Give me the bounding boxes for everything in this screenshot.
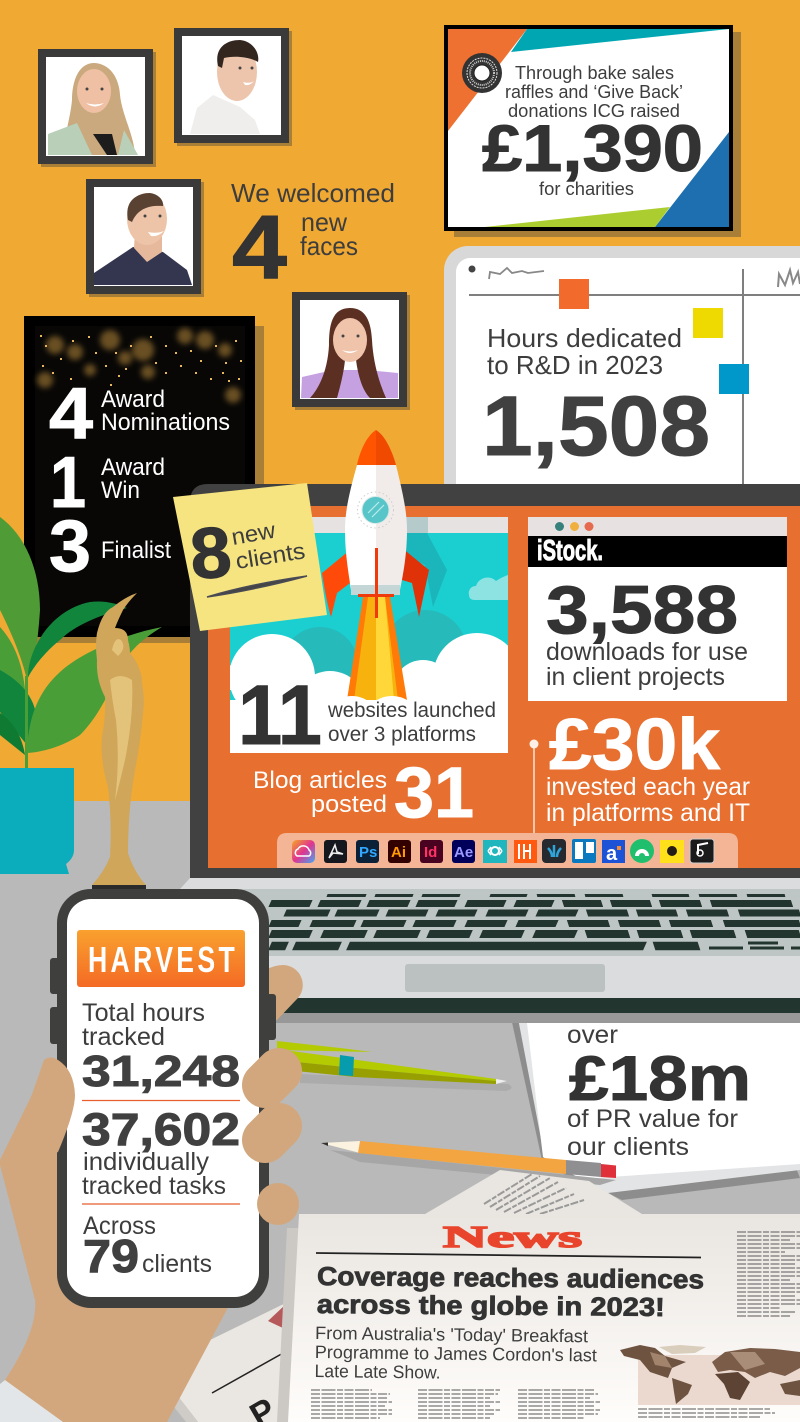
text: 11 websites launched: 11 [238,668,322,762]
panel: charity frame: Through bake sales [515,62,674,83]
framed photo: new starter 4 [292,292,410,410]
finger behind phone [260,965,303,1020]
rocket flame [347,597,407,700]
panel: PR value card: £18m [569,1044,751,1114]
panel: R&D whiteboard: to R&D in 2023 [487,350,663,380]
clouds over flame [347,696,407,700]
text: 30k invested: in platforms and IT [546,799,750,827]
text: 11 websites launched: over 3 platforms [328,723,476,746]
icon: mailchimp [660,840,684,863]
icon: after effects: Ae [454,844,473,861]
panel: phone Harvest stats: 31,248 [82,1047,240,1096]
panel: awards frame: Finalist [101,537,171,564]
sticky note: 8 new clients: 8 [188,512,234,595]
panel: phone Harvest stats: Across [83,1212,156,1240]
panel: phone Harvest stats [50,889,276,1308]
panel: R&D whiteboard: Hours dedicated [487,323,682,353]
shirt sleeve [0,1380,63,1422]
panel: charity frame: £1,390 [482,111,703,185]
hand thumb and fingers [30,1058,299,1225]
newspaper body copy [311,1232,800,1418]
panel: awards frame: Award [101,386,165,413]
panel: awards frame: Nominations [101,409,230,436]
panel: newspaper front page: Coverage reaches audiences [317,1261,704,1294]
icon: teal eye logo [483,840,507,863]
world map [620,1345,800,1405]
back newspaper [170,1296,300,1422]
panel: awards frame: Award [101,454,165,481]
desk surface [0,801,800,1422]
text: blog articles posted: 31 [394,754,474,833]
panel: phone Harvest stats: tracked [82,1023,165,1051]
panel: charity frame: for charities [539,178,634,199]
icon: green circle logo [630,839,654,863]
panel: newspaper front page: News [443,1219,582,1254]
panel: PR value card: our clients [567,1133,689,1161]
rocket [322,430,429,700]
text: 11 websites launched: websites launched [327,699,496,722]
browser window: iStock downloads: downloads for use [546,638,748,666]
browser window: iStock downloads [528,517,787,701]
icon: after effects [452,840,475,863]
icon: illustrator: Ai [391,844,406,861]
wall background [0,0,800,801]
text: we welcomed 4 new faces: faces [300,231,358,261]
panel: R&D whiteboard: 1,508 [482,379,710,473]
hand palm [0,1058,232,1422]
panel: phone Harvest stats: Total hours [82,999,205,1027]
keyboard keys [270,896,800,948]
framed photo: new starter 1 [38,49,156,167]
browser window: websites launched [229,517,521,753]
icon: illustrator [388,840,411,863]
panel: PR value card: over [567,1021,618,1049]
panel: awards frame: 3 [49,506,91,587]
pen [277,1041,512,1091]
panel: phone Harvest stats: 37,602 [82,1104,240,1155]
plant pot [0,768,74,874]
panel: awards frame: 4 [49,374,93,454]
text: 30k invested: invested each year [546,773,750,801]
panel: newspaper front page: Programme to James Cordon's last [315,1342,597,1365]
panel: charity frame [444,25,741,237]
text: we welcomed 4 new faces: 4 [232,198,287,298]
text: we welcomed 4 new faces: We welcomed [231,178,395,208]
panel: PR value card [510,1013,800,1200]
text: we welcomed 4 new faces [231,178,395,298]
text: blog articles posted: posted [311,791,387,818]
icon: acrobat [324,840,347,863]
plant [0,517,162,874]
panel: charity frame: raffles and ‘Give Back’ [505,81,683,102]
icon: indesign [420,840,443,863]
panel: awards frame: Win [101,477,140,504]
panel: R&D whiteboard [444,246,800,508]
text: we welcomed 4 new faces: new [301,207,347,237]
panel: newspaper front page: From Australia's 'Today' Breakfast [315,1323,588,1346]
browser window: iStock downloads: 3,588 [546,572,738,648]
panel: newspaper front page [277,1214,800,1422]
panel: phone Harvest stats: 79 [83,1230,139,1282]
Harvest logo: HARVEST [88,939,238,980]
laptop keyboard base [170,878,800,1023]
icon: blue a logo: a [606,843,618,865]
text: 30k invested [546,705,750,827]
award trophy [92,593,146,890]
icon: photoshop [356,840,379,863]
icon: blue a logo [602,840,625,865]
panel: phone Harvest stats: clients [142,1250,212,1278]
laptop screen [190,484,800,878]
text: blog articles posted: Blog articles [253,767,387,794]
icon: medallion [462,53,502,93]
icon: dark splash logo [542,839,566,863]
icon: orange bars logo [514,840,537,863]
sticky note: 8 new clients: clients [234,537,307,574]
text: 30k invested: £30k [549,705,721,785]
app dock [277,833,738,868]
icon: trello [572,839,596,863]
text: 11 websites launched [238,668,496,762]
pencil [321,1141,616,1185]
panel: charity frame: donations ICG raised [508,100,680,121]
icon: photoshop: Ps [359,844,377,861]
icon: stockphoto music [690,839,714,863]
newspaper flap [425,1170,642,1214]
text: blog articles posted [253,754,474,833]
framed photo: new starter 3 [86,179,204,297]
icon: indesign: Id [424,844,437,861]
icon: creative cloud [292,840,315,863]
panel: newspaper front page: Late Late Show. [314,1361,441,1383]
browser window: iStock downloads: iStock. [537,535,603,567]
framed photo: new starter 2 [174,28,292,146]
Harvest logo [77,930,245,987]
sticky note: 8 new clients: new [229,517,278,550]
browser window: iStock downloads: in client projects [546,663,725,691]
gold glitter [37,328,242,403]
callout: investment pin line [530,740,538,834]
sticky note: 8 new clients [173,483,327,631]
panel: awards frame [24,316,264,643]
panel: newspaper front page: across the globe in 2023! [317,1289,665,1322]
panel: awards frame: 1 [50,443,86,523]
panel: PR value card: of PR value for [567,1105,738,1133]
panel: phone Harvest stats: individually [83,1148,210,1176]
panel: phone Harvest stats: tracked tasks [82,1172,226,1200]
